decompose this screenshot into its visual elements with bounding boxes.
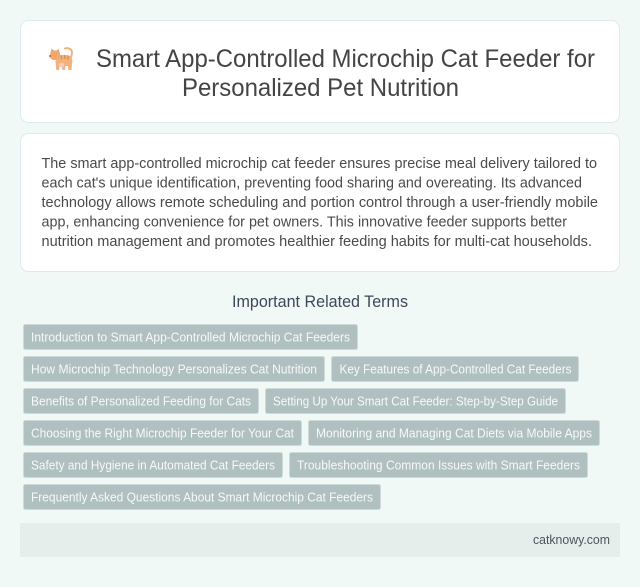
tag: introduction	[24, 324, 358, 350]
text block: description: app, enhancing convenience for pet owners. This innovative feeder supports better	[42, 214, 567, 230]
tag: faq: Frequently Asked Questions About Smart Microchip Cat Feeders	[31, 490, 373, 504]
tag: troubleshooting: Troubleshooting Common Issues with Smart Feeders	[297, 458, 580, 472]
text block: description	[42, 155, 598, 250]
tag: personalization	[24, 356, 324, 382]
text block: description: technology allows remote scheduling and portion control through a user-friendly mobile	[42, 194, 598, 211]
tag: faq	[24, 484, 380, 510]
tag: setup	[266, 388, 566, 414]
tag: choosing: Choosing the Right Microchip Feeder for Your Cat	[31, 426, 294, 440]
tag: introduction: Introduction to Smart App-Controlled Microchip Cat Feeders	[31, 330, 350, 344]
tag: setup: Setting Up Your Smart Cat Feeder: Step-by-Step Guide	[273, 394, 558, 408]
tag: personalization: How Microchip Technology Personalizes Cat Nutrition	[31, 362, 317, 376]
text block: description: each cat's unique identification, preventing food sharing and overeating. Its advanced	[42, 174, 582, 192]
text block: description: nutrition management and promotes healthier feeding habits for multi-cat households.	[42, 233, 592, 250]
icon: cat	[49, 48, 72, 70]
tag: troubleshooting	[290, 452, 588, 478]
footer: catknowy.com	[533, 532, 610, 547]
tag: safety: Safety and Hygiene in Automated Cat Feeders	[31, 458, 275, 472]
tag: safety	[24, 452, 282, 478]
tag: benefits	[24, 388, 258, 414]
tag: monitoring	[308, 420, 600, 446]
tag list: related terms	[24, 324, 600, 510]
panel: header	[20, 20, 620, 122]
title: Smart App-Controlled Microchip Cat Feeder for	[96, 45, 595, 73]
tag: benefits: Benefits of Personalized Feeding for Cats	[31, 394, 251, 408]
text block: description: The smart app-controlled microchip cat feeder ensures precise meal delivery tailored to	[42, 155, 597, 172]
title	[96, 45, 595, 102]
panel: description	[20, 134, 620, 272]
tag: key features	[332, 356, 578, 382]
tag: choosing	[24, 420, 302, 446]
footer	[20, 523, 620, 557]
tag: key features: Key Features of App-Controlled Cat Feeders	[340, 362, 572, 376]
heading: related terms: Important Related Terms	[232, 293, 408, 311]
tag: monitoring: Monitoring and Managing Cat Diets via Mobile Apps	[316, 426, 592, 440]
title: Personalized Pet Nutrition	[182, 74, 459, 102]
